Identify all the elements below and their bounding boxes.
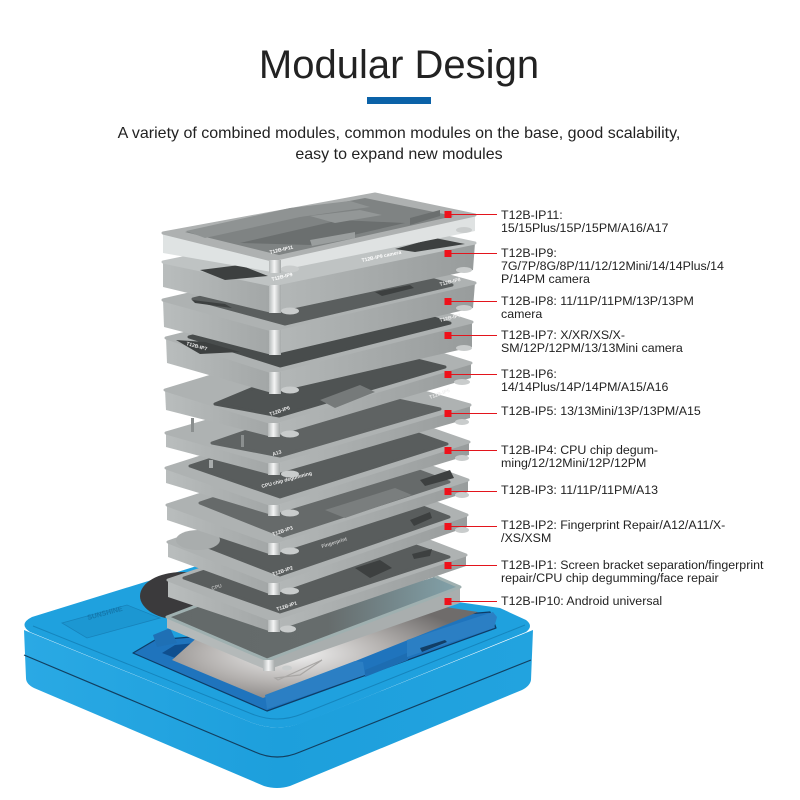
- subtitle: easy to expand new modules: [295, 146, 503, 163]
- callout: T12B-IP11: 15/15Plus/15P/15PM/A16/A17: [501, 221, 668, 235]
- callout: T12B-IP7: T12B-IP7: X/XR/XS/X-: [501, 328, 625, 342]
- base logo plate: [62, 605, 160, 638]
- callout: T12B-IP5: T12B-IP5: 13/13Mini/13P/13PM/A15: [501, 404, 701, 418]
- callout: T12B-IP2: [444, 518, 725, 545]
- subtitle: [118, 125, 680, 163]
- module: T12B-IP5: A13: [272, 449, 283, 458]
- callout: T12B-IP4: T12B-IP4: CPU chip degum-: [501, 443, 658, 457]
- title: Modular Design: [259, 43, 539, 87]
- screw: [282, 666, 292, 670]
- module: T12B-IP9: T12B-IP9: [271, 272, 293, 283]
- callout: T12B-IP10: T12B-IP10: Android universal: [501, 594, 662, 608]
- module: T12B-IP8: [163, 253, 475, 355]
- module: T12B-IP1: [168, 515, 466, 632]
- module: T12B-IP7: T12B-IP7: [439, 313, 461, 324]
- module: T12B-IP4: [166, 405, 469, 516]
- module: T12B-IP2: Fingerprint: [321, 536, 348, 550]
- module: T12B-IP5: [166, 375, 470, 478]
- module: T12B-IP6: T12B-IP6: [269, 405, 291, 418]
- module: T12B-IP6: [165, 330, 471, 438]
- base logo plate: SUNSHINE: [87, 606, 124, 622]
- frame clamp bars: [265, 661, 365, 709]
- module: T12B-IP3: T12B-IP3: [272, 525, 294, 538]
- module: T12B-IP10: [167, 544, 460, 671]
- module: T12B-IP1: CPU: [211, 583, 223, 592]
- callout: T12B-IP1: repair/CPU chip degumming/face repair: [501, 571, 719, 585]
- callout: T12B-IP1: T12B-IP1: Screen bracket separation/fingerprint: [501, 558, 764, 572]
- module: T12B-IP9: T12B-IP9 camera: [361, 250, 402, 264]
- callout: T12B-IP4: ming/12/12Mini/12P/12PM: [501, 456, 646, 470]
- subtitle: A variety of combined modules, common modules on the base, good scalability,: [118, 125, 680, 142]
- callout: T12B-IP8: [444, 294, 694, 321]
- callout: T12B-IP4: [444, 443, 658, 470]
- module: T12B-IP10: T12B-IP10: [421, 570, 446, 583]
- module: T12B-IP1: T12B-IP1: [276, 601, 298, 613]
- callout: T12B-IP8: camera: [501, 307, 542, 321]
- black dial on base: [140, 572, 224, 620]
- callout: T12B-IP11: [444, 208, 668, 235]
- blue base station: [24, 565, 533, 788]
- module: T12B-IP5: T12B-IP5: [429, 388, 451, 401]
- module: T12B-IP2: T12B-IP2: [272, 565, 294, 578]
- callout: T12B-IP7: [444, 328, 683, 355]
- callout: T12B-IP2: /XS/XSM: [501, 531, 551, 545]
- module: T12B-IP9: [163, 220, 475, 314]
- callout: T12B-IP6: 14/14Plus/14P/14PM/A15/A16: [501, 380, 668, 394]
- module: T12B-IP2: [168, 474, 469, 595]
- recessed heating bay: [133, 612, 496, 711]
- callout: T12B-IP7: SM/12P/12PM/13/13Mini camera: [501, 341, 683, 355]
- callout: T12B-IP1: [444, 558, 764, 585]
- callout: T12B-IP11: T12B-IP11:: [501, 208, 563, 222]
- callout: T12B-IP8: T12B-IP8: 11/11P/11PM/13P/13PM: [501, 294, 694, 308]
- module: T12B-IP3: [167, 442, 469, 555]
- callout: T12B-IP6: T12B-IP6:: [501, 367, 557, 381]
- module: T12B-IP11: T12B-IP11: [269, 245, 294, 256]
- callout: T12B-IP9: [444, 246, 724, 286]
- callout: T12B-IP9: P/14PM camera: [501, 272, 590, 286]
- module: T12B-IP6: T12B-IP5: [431, 346, 453, 358]
- callout: T12B-IP6: [444, 367, 668, 394]
- module: T12B-IP4: CPU chip degumming: [261, 471, 313, 490]
- callout: T12B-IP9: 7G/7P/8G/8P/11/12/12Mini/14/14Plus/14: [501, 259, 724, 273]
- title accent bar: [367, 97, 431, 104]
- module: T12B-IP8: T12B-IP8: [439, 277, 461, 288]
- callout: T12B-IP2: T12B-IP2: Fingerprint Repair/A12/A11/X-: [501, 518, 725, 532]
- module: T12B-IP11: [163, 194, 475, 273]
- callout: T12B-IP3: T12B-IP3: 11/11P/11PM/A13: [501, 483, 658, 497]
- callout: T12B-IP9: T12B-IP9:: [501, 246, 557, 260]
- module: T12B-IP7: T12B-IP7: [185, 341, 208, 353]
- module: T12B-IP7: [166, 288, 472, 394]
